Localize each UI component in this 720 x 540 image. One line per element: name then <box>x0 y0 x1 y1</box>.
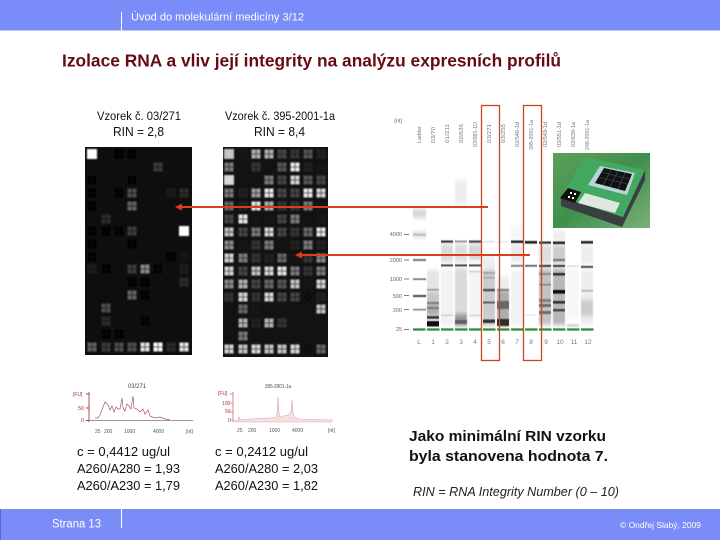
sample 1 measurements <box>77 445 180 493</box>
gel lane names: 395-2001-1a <box>529 119 535 150</box>
sample 2 measurements: A260/A280 = 2,03 <box>215 462 318 476</box>
photo of RNA chip <box>553 153 650 228</box>
gel bands <box>413 234 593 327</box>
RIN definition: RIN = RNA Integrity Number (0 – 10) <box>413 485 619 499</box>
sample 2 heading <box>225 111 336 139</box>
electropherogram: sample 2: 200 <box>248 428 257 434</box>
sample 1 heading <box>97 111 181 139</box>
sample 2 heading: RIN = 8,4 <box>254 125 305 139</box>
gel size scale: 500 <box>393 294 402 300</box>
gel lane names: 03/70 <box>431 127 437 143</box>
electropherogram: sample 1: [nt] <box>186 429 194 435</box>
lane numbers: 8 <box>529 339 533 346</box>
gel size scale: 1000 <box>390 277 402 283</box>
arrow to sample 1 array <box>175 204 488 210</box>
gel lane names: 02/636 <box>459 124 465 143</box>
electropherogram: sample 2 <box>218 384 336 434</box>
lane numbers: 7 <box>515 339 519 346</box>
gel lane names: Ladder <box>417 126 423 143</box>
electropherogram: sample 1: 25 <box>95 429 101 435</box>
electropherogram: sample 1: 0 <box>81 418 84 424</box>
gel lane names <box>417 119 591 150</box>
lane numbers: 2 <box>445 339 449 346</box>
red highlight box: lane 5 <box>482 106 500 360</box>
gel lane names: 01/211 <box>445 124 451 143</box>
electropherogram: sample 1: 200 <box>104 429 113 435</box>
gel lane names: 02/546-1d <box>515 122 521 147</box>
gel size scale: 4000 <box>390 232 402 238</box>
arrow to sample 2 array <box>295 252 530 258</box>
electropherogram: sample 1: [FU] <box>73 392 83 398</box>
gel lane names: 03/081-1D <box>473 122 479 147</box>
microarray: sample 1 <box>85 147 192 355</box>
copyright: © Ondřej Slabý, 2009 <box>620 521 702 530</box>
electropherogram: sample 2: [FU] <box>218 391 228 397</box>
electropherogram: sample 2: [nt] <box>328 428 336 434</box>
electropherogram: sample 1: 03/271 <box>128 384 147 390</box>
lane numbers: 6 <box>501 339 505 346</box>
gel lane names: 02/639-1a <box>571 121 577 147</box>
electropherogram: sample 1: 1000 <box>124 429 135 435</box>
sample 2 heading: Vzorek č. 395-2001-1a <box>225 111 336 123</box>
header text: Úvod do molekulární medicíny 3/12 <box>131 10 304 24</box>
header bar <box>0 0 720 30</box>
sample 1 measurements: c = 0,4412 ug/ul <box>77 445 170 459</box>
lane numbers <box>417 339 592 346</box>
gel lane names: 03/271 <box>487 124 493 143</box>
footer bar <box>0 509 720 540</box>
lane numbers: 9 <box>544 339 548 346</box>
gel size scale: 200 <box>393 308 402 314</box>
gel lane names: 02/551-1d <box>557 122 563 147</box>
microarray: sample 2 <box>223 147 328 357</box>
electropherogram: sample 2: 100 <box>222 401 231 407</box>
gel electrophoresis image <box>390 118 595 346</box>
gel lane names: 03/255 <box>501 124 507 143</box>
gel lane names: 248-2001-1a <box>585 119 591 150</box>
sample 2 measurements <box>215 445 318 493</box>
electropherogram: sample 2: 1000 <box>269 428 280 434</box>
lane numbers: 1 <box>431 339 435 346</box>
lane numbers: 5 <box>487 339 491 346</box>
page number: Strana 13 <box>52 518 101 530</box>
sample 1 heading: Vzorek č. 03/271 <box>97 111 181 123</box>
green baseline markers <box>413 328 595 331</box>
electropherogram: sample 2: 25 <box>237 428 243 434</box>
gel size scale <box>390 118 409 333</box>
lane numbers: 3 <box>459 339 463 346</box>
electropherogram: sample 2: 50 <box>225 409 231 415</box>
sample 1 heading: RIN = 2,8 <box>113 125 164 139</box>
gel size scale: 2000 <box>390 258 402 264</box>
conclusion text: byla stanovena hodnota 7. <box>409 449 608 465</box>
gel lane names: 02/549-1d <box>543 122 549 147</box>
electropherogram: sample 2: 0 <box>228 418 231 424</box>
sample 2 measurements: c = 0,2412 ug/ul <box>215 445 308 459</box>
lane numbers: 11 <box>571 339 578 346</box>
gel size scale: 25 <box>396 327 402 333</box>
gel size scale: [nt] <box>394 118 402 124</box>
electropherogram: sample 2: 4000 <box>292 428 303 434</box>
sample 1 measurements: A260/A230 = 1,79 <box>77 479 180 493</box>
electropherogram: sample 2: 395-2001-1a <box>265 384 291 390</box>
gel smears <box>413 180 593 326</box>
red highlight box: lane 8 <box>524 106 542 360</box>
conclusion text: Jako minimální RIN vzorku <box>409 429 606 445</box>
electropherogram: sample 1: 50 <box>78 406 84 412</box>
title: Izolace RNA a vliv její integrity na analýzu expresních profilů <box>62 50 561 70</box>
electropherogram: sample 1: 4000 <box>153 429 164 435</box>
lane numbers: 10 <box>556 339 564 346</box>
lane numbers: 4 <box>473 339 477 346</box>
lane numbers: 12 <box>584 339 592 346</box>
lane numbers: L <box>417 339 421 346</box>
sample 2 measurements: A260/A230 = 1,82 <box>215 479 318 493</box>
conclusion text <box>409 429 608 465</box>
sample 1 measurements: A260/A280 = 1,93 <box>77 462 180 476</box>
electropherogram: sample 1 <box>73 384 194 435</box>
